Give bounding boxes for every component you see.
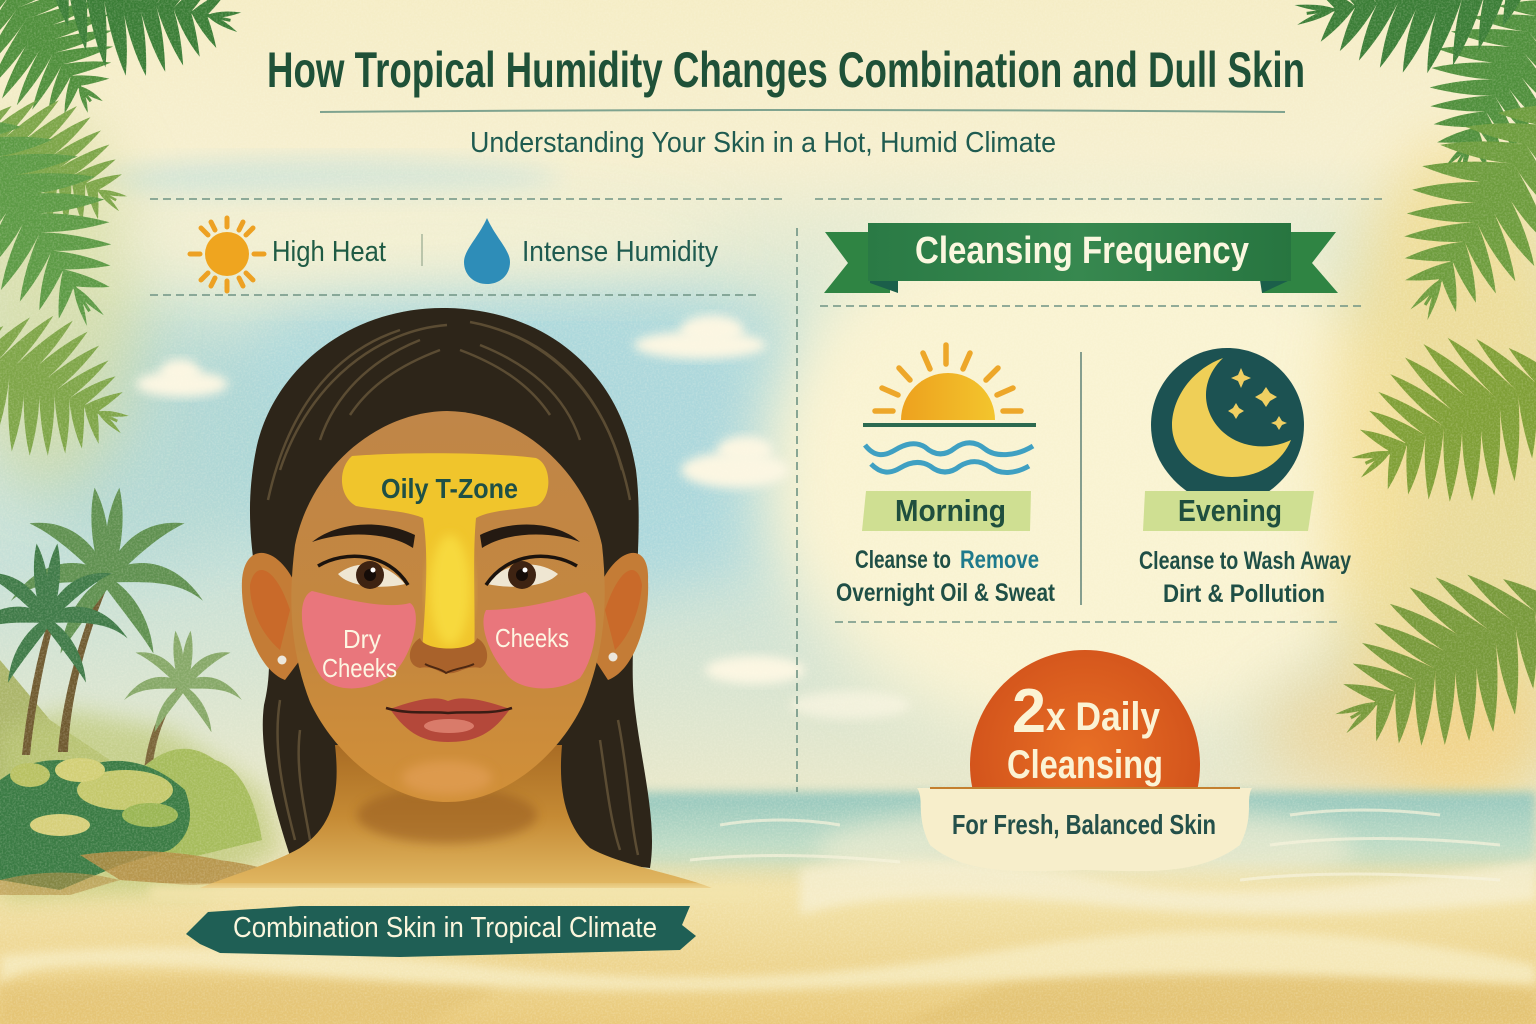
badge: 2x daily cleansing: Cleansing	[1007, 743, 1163, 787]
label: morning: Morning	[895, 493, 1006, 528]
badge: 2x daily cleansing	[917, 650, 1252, 880]
text: morning note: Overnight Oil & Sweat	[836, 579, 1056, 607]
label: evening: Evening	[1178, 493, 1282, 528]
icon: water drop	[464, 218, 510, 284]
left ear	[242, 553, 300, 680]
ribbon: cleansing frequency	[824, 223, 1338, 293]
nose	[410, 638, 487, 673]
icon: sun	[190, 218, 264, 291]
right cheek	[483, 592, 596, 688]
label: high heat: High Heat	[272, 236, 386, 268]
caption banner: combination skin	[186, 906, 696, 957]
caption banner: combination skin: Combination Skin in Tropical Climate	[233, 912, 657, 944]
label: intense humidity: Intense Humidity	[522, 236, 718, 268]
subtitle: Understanding Your Skin in a Hot, Humid Climate	[470, 127, 1056, 159]
illustration: woman's face with skin zones	[200, 308, 712, 888]
text: evening note: Cleanse to Wash Away	[1139, 547, 1351, 575]
left eye	[318, 556, 408, 589]
badge: 2x daily cleansing: x Daily	[1046, 695, 1161, 739]
right eye	[486, 556, 577, 589]
icon: crescent moon and stars	[1151, 348, 1304, 492]
icon: sun over waves	[863, 345, 1036, 473]
label: oily t-zone: Oily T-Zone	[381, 473, 518, 504]
right ear	[595, 553, 648, 680]
lips	[386, 698, 512, 742]
panel: morning	[836, 345, 1056, 607]
beach trees and bushes	[0, 488, 300, 900]
ribbon: cleansing frequency: Cleansing Frequency	[915, 230, 1249, 272]
climate factors row	[190, 218, 718, 291]
eyebrows	[312, 525, 415, 548]
clouds	[136, 315, 910, 719]
label: evening	[1143, 491, 1314, 531]
label: dry cheeks: Dry	[343, 624, 381, 654]
text: morning note: Remove	[960, 546, 1039, 574]
label: cheeks: Cheeks	[495, 623, 569, 653]
text: morning note: Cleanse to	[855, 546, 951, 574]
sand in front of shoulders	[150, 886, 750, 900]
label: dry cheeks: Cheeks	[322, 653, 397, 683]
T-zone	[342, 453, 548, 652]
sea waves	[690, 810, 1500, 880]
text: evening note: Dirt & Pollution	[1163, 580, 1325, 608]
badge: 2x daily cleansing: 2	[1012, 677, 1046, 746]
palm fronds: corners	[0, 0, 1536, 796]
panel: evening	[1139, 348, 1351, 608]
face	[291, 411, 605, 802]
back hair	[250, 308, 652, 868]
badge: 2x daily cleansing: For Fresh, Balanced Skin	[952, 809, 1216, 840]
label: morning	[862, 491, 1031, 531]
shoulders and neck	[200, 745, 712, 888]
left cheek	[302, 591, 416, 688]
